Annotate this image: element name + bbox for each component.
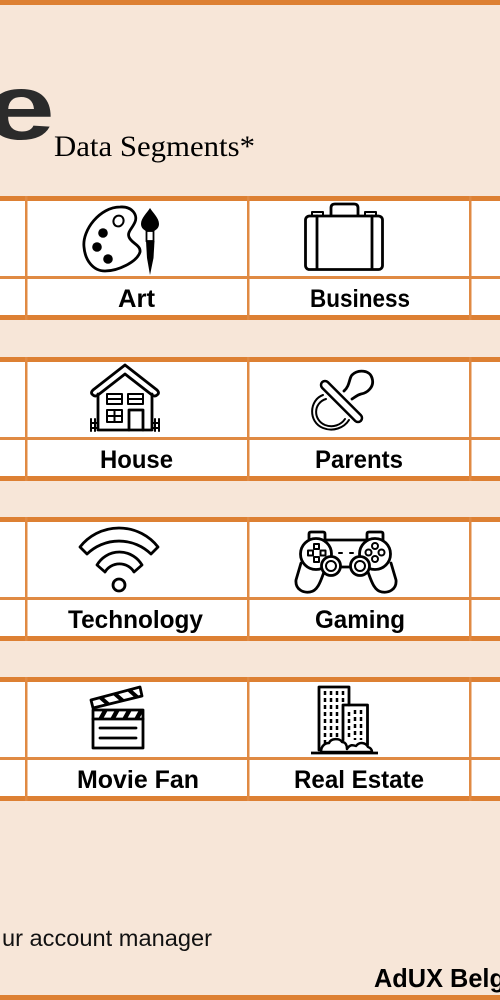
panel: segment row 3 <box>0 517 500 641</box>
label: Movie Fan: Movie Fan <box>77 766 199 794</box>
subtitle: Data Segments: Data Segments* <box>54 130 255 163</box>
icon: buildings <box>311 687 378 753</box>
panel: segment row 4 <box>0 677 500 801</box>
icon: movie clapperboard <box>91 687 143 748</box>
text block: contact note: ur account manager <box>2 925 212 951</box>
label: Real Estate: Real Estate <box>294 766 424 794</box>
icon: baby pacifier <box>312 371 373 430</box>
label: Gaming: Gaming <box>315 606 405 634</box>
icon: house <box>91 365 159 431</box>
label: Parents: Parents <box>315 446 403 474</box>
icon: artist palette and brush <box>84 207 159 275</box>
icon: briefcase <box>306 204 382 270</box>
label: Business: Business <box>310 285 410 313</box>
panel: segment row 2 <box>0 357 500 481</box>
label: Art: Art <box>118 285 156 313</box>
label: House: House <box>100 446 173 474</box>
icon: wifi <box>80 528 158 591</box>
panel: segment row 1 <box>0 196 500 320</box>
label: Technology: Technology <box>68 606 203 634</box>
icon: game controller <box>296 532 396 592</box>
